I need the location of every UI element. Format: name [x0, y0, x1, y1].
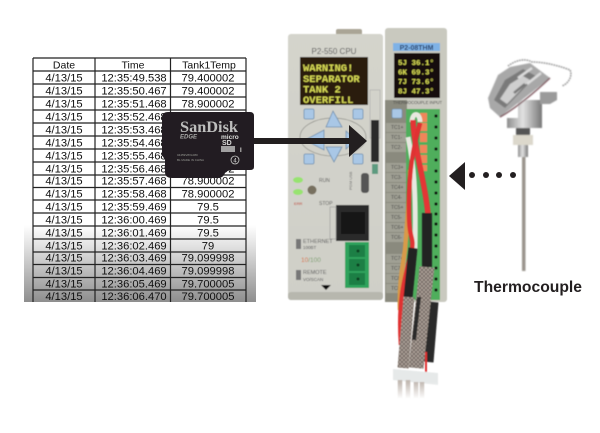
data log table — [24, 58, 256, 303]
data log table: 79.099998 — [182, 252, 234, 264]
CPU display: OVERFILL — [303, 95, 353, 107]
data log table: 12:36:01.469 — [101, 228, 167, 240]
port labels — [296, 239, 333, 290]
microSD card: I — [240, 148, 242, 154]
data log table: 78.900002 — [182, 98, 234, 110]
microSD card — [162, 112, 254, 178]
channel labels: TC1- — [391, 135, 402, 141]
connection head — [488, 60, 571, 128]
thermocouple sensor — [488, 60, 571, 271]
data log table: 4/13/15 — [45, 86, 83, 98]
cable tie — [393, 369, 438, 385]
data log table: 78.900002 — [182, 112, 234, 124]
channel labels: TC2- — [391, 145, 402, 151]
data log table: 4/13/15 — [45, 228, 83, 240]
data log table: 4/13/15 — [45, 214, 83, 226]
data log table: 4/13/15 — [45, 278, 83, 290]
data log table: 12:35:49.538 — [101, 72, 167, 84]
data log table: 79.099998 — [182, 266, 234, 278]
channel labels: TC1+ — [391, 125, 403, 131]
data log table: 4/13/15 — [45, 98, 83, 110]
channel labels: TC6+ — [391, 225, 403, 231]
table header: Time — [122, 60, 145, 72]
microSD card: EDGE — [180, 134, 198, 140]
status LEDs and run switch — [293, 177, 333, 207]
data log table: 12:35:57.468 — [101, 176, 167, 188]
microSD card: micro — [221, 134, 239, 141]
arrow: thermocouple to module — [449, 162, 516, 190]
port labels: REMOTE — [303, 270, 327, 276]
CPU label: P2-550 CPU — [312, 47, 357, 56]
module label — [393, 43, 440, 52]
data log table: 78.900002 — [182, 188, 234, 200]
table header: Date — [53, 60, 75, 72]
data log table: 79.5 — [197, 228, 219, 240]
port labels: ETHERNET — [303, 239, 333, 245]
probe stem — [522, 157, 526, 271]
channel labels: TC8+ — [391, 276, 403, 282]
microSD card: 04459V8VL080 — [177, 153, 198, 157]
data log table: 79.400002 — [182, 86, 234, 98]
data log table: 12:36:02.469 — [101, 240, 167, 252]
data log table: 78.900002 — [182, 138, 234, 150]
data log table: 12:36:03.469 — [101, 252, 167, 264]
thermocouple label: Thermocouple — [474, 279, 582, 296]
green terminal block — [406, 109, 440, 300]
CPU display: TANK 2 — [303, 84, 341, 96]
data log table: 79 — [202, 240, 214, 252]
data log table: 78.900002 — [182, 176, 234, 188]
data log table: 4/13/15 — [45, 188, 83, 200]
data log table: 4/13/15 — [45, 112, 83, 124]
data log table: 79.400002 — [182, 72, 234, 84]
module display — [394, 53, 440, 98]
data log table: 4/13/15 — [45, 124, 83, 136]
data log table: 79.5 — [197, 202, 219, 214]
port labels: 100BT — [303, 245, 317, 250]
USB port — [348, 171, 369, 193]
status LEDs and run switch: ERR — [294, 201, 303, 206]
data log table: 12:36:06.470 — [101, 291, 167, 303]
module display: 6K 69.3° — [398, 68, 434, 78]
data log table: 4/13/15 — [45, 252, 83, 264]
data log table: 4/13/15 — [45, 266, 83, 278]
channel labels: TC3- — [391, 175, 402, 181]
channel labels: TC6- — [391, 235, 402, 241]
data log table: 12:36:00.469 — [101, 214, 167, 226]
channel labels: TC5- — [391, 215, 402, 221]
module display: 8J 47.3° — [398, 88, 434, 96]
channel labels: TC8- — [391, 286, 402, 292]
data log table: 12:35:58.468 — [101, 188, 167, 200]
data log table: 78.900002 — [182, 164, 234, 176]
channel labels: TC4- — [391, 195, 402, 201]
module display: 7J 73.6° — [398, 78, 434, 87]
data log table: 12:36:05.469 — [101, 278, 167, 290]
data log table: 4/13/15 — [45, 240, 83, 252]
microSD card: SanDisk — [180, 119, 238, 136]
microSD card: SD — [222, 140, 232, 147]
data log table: 4/13/15 — [45, 291, 83, 303]
thermocouple wires — [390, 114, 440, 399]
SD card slot — [370, 90, 380, 174]
channel labels: TC3+ — [391, 165, 403, 171]
data log table: 4/13/15 — [45, 164, 83, 176]
status LEDs and run switch: RUN — [319, 178, 330, 184]
P2-08THM thermocouple module: THERMOCOUPLE INPUT — [393, 100, 443, 105]
module display: 5J 36.1° — [398, 59, 434, 68]
data log table: 12:35:52.468 — [101, 112, 167, 124]
CPU display — [300, 57, 368, 107]
data log table: 12:35:54.468 — [101, 138, 167, 150]
P2-08THM thermocouple module — [385, 28, 447, 302]
ethernet jack — [330, 205, 369, 241]
navigation buttons — [300, 109, 366, 164]
microSD card: BL MADE IN CHINA — [177, 158, 204, 162]
CPU display: SEPARATOR — [303, 74, 360, 86]
channel labels — [391, 125, 403, 292]
data log table: 4/13/15 — [45, 72, 83, 84]
data log table: 12:35:59.469 — [101, 202, 167, 214]
port labels: 10/100 — [301, 257, 321, 264]
CPU display: WARNING! — [303, 63, 353, 75]
data log table: 4/13/15 — [45, 138, 83, 150]
P2-550 CPU module — [288, 29, 383, 300]
arrow: SD card to CPU — [254, 125, 367, 157]
data log table: 12:35:51.468 — [101, 98, 167, 110]
table header — [53, 60, 236, 72]
data log table: 12:35:56.468 — [101, 164, 167, 176]
data log table: 12:36:04.469 — [101, 266, 167, 278]
status LEDs and run switch: STOP — [319, 201, 333, 207]
data log table: 4/13/15 — [45, 176, 83, 188]
module label: P2-08THM — [400, 45, 434, 52]
channel labels: TC5+ — [391, 205, 403, 211]
data log table: 12:35:53.468 — [101, 124, 167, 136]
data log table: 78.900002 — [182, 124, 234, 136]
port labels: VO/SCAN — [303, 277, 323, 282]
compression fitting — [513, 128, 533, 157]
data log table: 79.700005 — [182, 291, 234, 303]
channel labels: TC7+ — [391, 256, 403, 262]
table header: Tank1Temp — [182, 60, 236, 72]
microSD card: 4 — [233, 158, 237, 164]
data log table: 4/13/15 — [45, 150, 83, 162]
USB port: PGM USB — [348, 171, 353, 190]
data log table: 78.900002 — [182, 150, 234, 162]
data log table: 79.5 — [197, 214, 219, 226]
data log table: 79.700005 — [182, 278, 234, 290]
data log table: 12:35:50.467 — [101, 86, 167, 98]
channel labels: TC7- — [391, 266, 402, 272]
data log table: 12:35:55.468 — [101, 150, 167, 162]
green power connector — [345, 242, 369, 288]
data log table: 4/13/15 — [45, 202, 83, 214]
channel labels: TC4+ — [391, 185, 403, 191]
